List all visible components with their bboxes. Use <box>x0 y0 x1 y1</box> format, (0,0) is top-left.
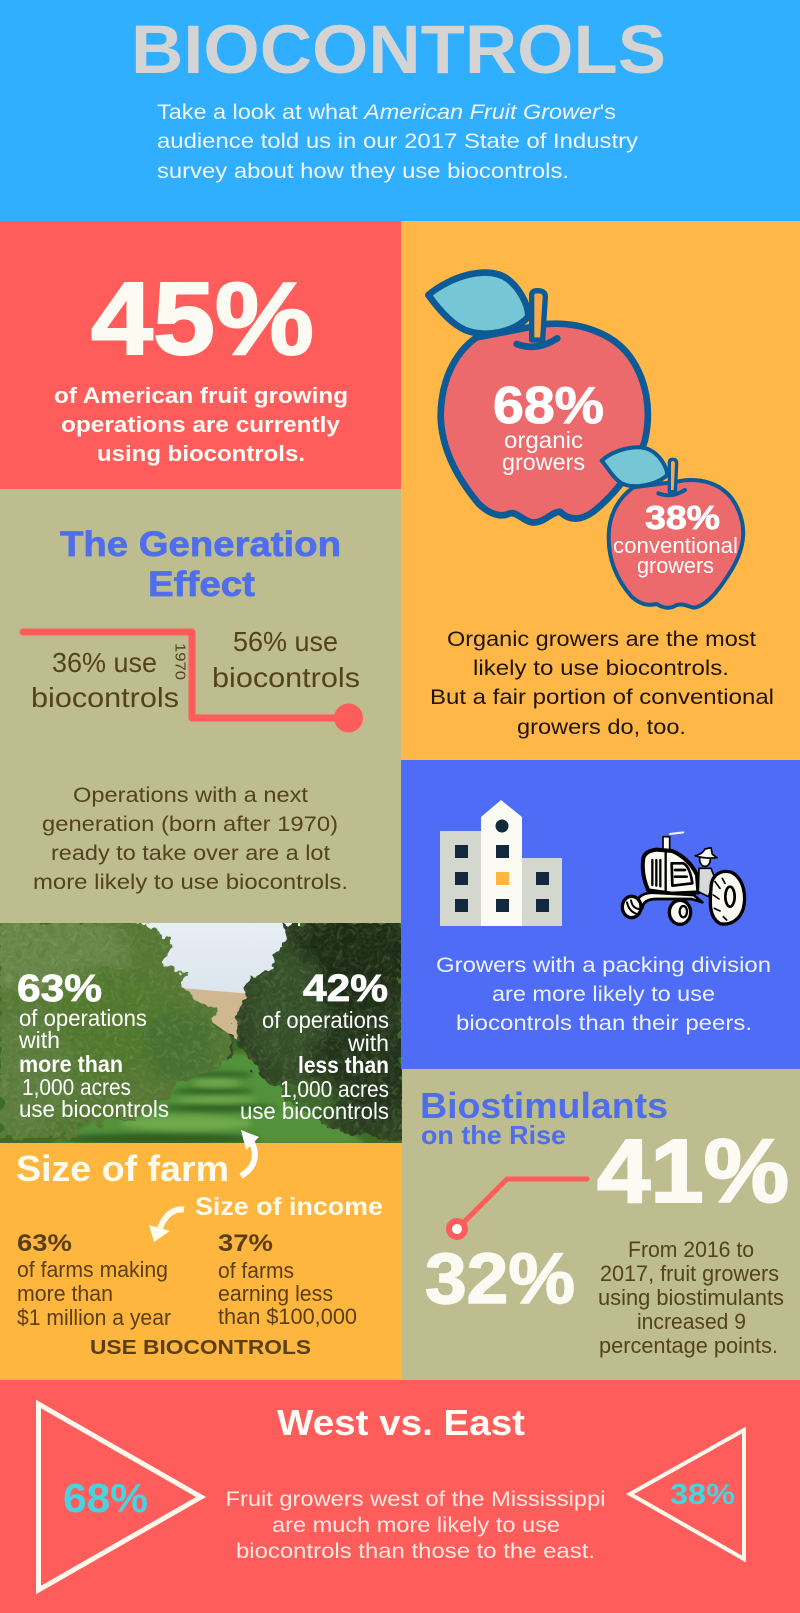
label: 56% use biocontrols <box>212 626 360 693</box>
label: 36% use biocontrols: biocontrols <box>31 682 179 713</box>
panel: 45 percent <box>0 221 401 489</box>
generation description: more likely to use biocontrols. <box>33 871 348 894</box>
45 percent description: using biocontrols. <box>97 441 305 466</box>
stat: 37% of farms under $100,000: than $100,000 <box>218 1304 357 1329</box>
stat: 38% conventional growers <box>613 499 738 578</box>
label: 56% use biocontrols: 56% use <box>233 626 338 657</box>
stat: 68% organic growers: growers <box>502 449 585 475</box>
stat: 42% less than 1,000 acres: with <box>347 1030 389 1056</box>
stat: 37% of farms under $100,000: earning less <box>218 1281 333 1306</box>
stat: 63% of farms over $1 million: 63% <box>17 1230 72 1257</box>
intro text: survey about how they use biocontrols. <box>157 160 569 183</box>
generation heading: The Generation <box>60 525 341 564</box>
organic growers description: growers do, too. <box>517 716 686 739</box>
arrow: size of farm to photo <box>241 1130 259 1176</box>
organic growers description: Organic growers are the most <box>447 628 756 651</box>
stat: 63% more than 1,000 acres: with <box>18 1027 60 1053</box>
stat: 42% less than 1,000 acres: of operations <box>262 1007 389 1033</box>
stat: 37% of farms under $100,000 <box>218 1230 357 1329</box>
panel: organic vs conventional apples <box>401 221 800 760</box>
packing division description: Growers with a packing division <box>436 954 771 977</box>
label: 36% use biocontrols <box>31 647 179 713</box>
west vs east description: are much more likely to use <box>272 1514 560 1537</box>
west vs east description: biocontrols than those to the east. <box>236 1540 595 1563</box>
big stat 32%: 32% <box>425 1240 575 1319</box>
stat: 63% of farms over $1 million <box>17 1230 171 1330</box>
biostimulants description: increased 9 <box>637 1309 746 1334</box>
45 percent description <box>54 383 348 466</box>
stat: 63% of farms over $1 million: of farms making <box>17 1257 168 1282</box>
biostimulants heading: Biostimulants <box>420 1085 668 1126</box>
stat: 38% conventional growers: 38% <box>645 499 720 536</box>
label: 56% use biocontrols: biocontrols <box>212 662 360 693</box>
icon: large apple <box>428 273 648 522</box>
45 percent description: of American fruit growing <box>54 383 348 408</box>
generation heading <box>60 525 341 604</box>
stat: 63% more than 1,000 acres: 1,000 acres <box>22 1074 131 1100</box>
stat: 38% conventional growers: conventional <box>613 533 738 558</box>
intro text <box>157 101 639 183</box>
organic growers description: likely to use biocontrols. <box>473 657 729 680</box>
stat: 42% less than 1,000 acres <box>240 968 389 1124</box>
stat: 37% of farms under $100,000: of farms <box>218 1258 294 1283</box>
heading: size of income: Size of income <box>195 1193 383 1221</box>
label: 36% use biocontrols: 36% use <box>52 647 157 678</box>
icon: small apple <box>602 447 743 608</box>
big stat 45%: 45% <box>91 261 314 376</box>
timeline step line <box>23 632 363 732</box>
stat: 38% conventional growers: growers <box>637 553 714 578</box>
triangle: east 38% <box>630 1430 744 1559</box>
generation description <box>33 784 348 894</box>
generation description: Operations with a next <box>73 784 308 807</box>
stat: 63% more than 1,000 acres <box>17 968 169 1122</box>
label: 1970: 1970 <box>172 643 188 680</box>
west vs east description <box>226 1488 606 1563</box>
orchard illustration <box>0 923 402 1143</box>
west vs east description: Fruit growers west of the Mississippi <box>226 1488 606 1511</box>
triangle: west 68% <box>38 1404 201 1590</box>
packing division description: biocontrols than their peers. <box>456 1012 752 1035</box>
triangle: east 38%: 38% <box>670 1479 735 1511</box>
stat: 42% less than 1,000 acres: less than <box>298 1052 389 1078</box>
stat: 37% of farms under $100,000: 37% <box>218 1230 273 1257</box>
generation description: ready to take over are a lot <box>51 842 330 865</box>
panel: the generation effect <box>0 489 401 923</box>
45 percent description: operations are currently <box>61 412 341 437</box>
generation description: generation (born after 1970) <box>42 813 338 836</box>
stat: 63% more than 1,000 acres: use biocontrols <box>19 1096 169 1122</box>
west vs east heading: West vs. East <box>277 1402 525 1443</box>
intro text: audience told us in our 2017 State of Industry <box>157 130 639 153</box>
stat: 42% less than 1,000 acres: 1,000 acres <box>280 1076 389 1102</box>
panel: packing division <box>401 760 800 1069</box>
panel: west vs east <box>0 1380 800 1613</box>
stat: 42% less than 1,000 acres: 42% <box>303 968 388 1010</box>
biostimulants heading: on the Rise <box>421 1120 566 1150</box>
biostimulants description: From 2016 to <box>628 1237 754 1262</box>
panel: size of farm and income <box>0 1143 402 1381</box>
heading: size of farm: Size of farm <box>16 1148 229 1189</box>
packing division description: are more likely to use <box>492 983 715 1006</box>
biostimulants description <box>598 1237 784 1358</box>
stat: 63% of farms over $1 million: more than <box>17 1281 113 1306</box>
stat: 63% more than 1,000 acres: of operations <box>19 1005 147 1031</box>
icon: tractor <box>622 832 745 924</box>
biostimulants heading <box>420 1085 668 1150</box>
biostimulants description: using biostimulants <box>598 1285 784 1310</box>
arrow: income to 63% <box>149 1209 184 1242</box>
packing division description <box>436 954 771 1035</box>
rising trend line <box>449 1179 587 1237</box>
stat: 68% organic growers: organic <box>504 427 583 453</box>
intro text: Take a look at what American Fruit Grower 's <box>157 101 616 124</box>
generation heading: Effect <box>148 565 255 604</box>
biostimulants description: 2017, fruit growers <box>600 1261 779 1286</box>
stat: 68% organic growers: 68% <box>493 377 604 435</box>
biostimulants description: percentage points. <box>599 1333 778 1358</box>
organic growers description: But a fair portion of conventional <box>430 686 774 709</box>
organic growers description <box>430 628 774 739</box>
panel: orchard photo <box>0 923 402 1143</box>
panel: biostimulants on the rise <box>402 1069 800 1380</box>
big stat 41%: 41% <box>597 1122 789 1222</box>
title: BIOCONTROLS <box>131 11 666 88</box>
stat: 63% more than 1,000 acres: 63% <box>17 968 102 1010</box>
stat: 63% more than 1,000 acres: more than <box>19 1051 123 1077</box>
icon: building <box>440 800 562 926</box>
stat: 68% organic growers <box>493 377 604 475</box>
stat: 63% of farms over $1 million: $1 million a year <box>17 1305 171 1330</box>
triangle: west 68%: 68% <box>63 1475 148 1521</box>
panel: header <box>0 0 800 221</box>
stat: 42% less than 1,000 acres: use biocontrols <box>240 1098 389 1124</box>
label: use biocontrols: USE BIOCONTROLS <box>90 1337 311 1359</box>
